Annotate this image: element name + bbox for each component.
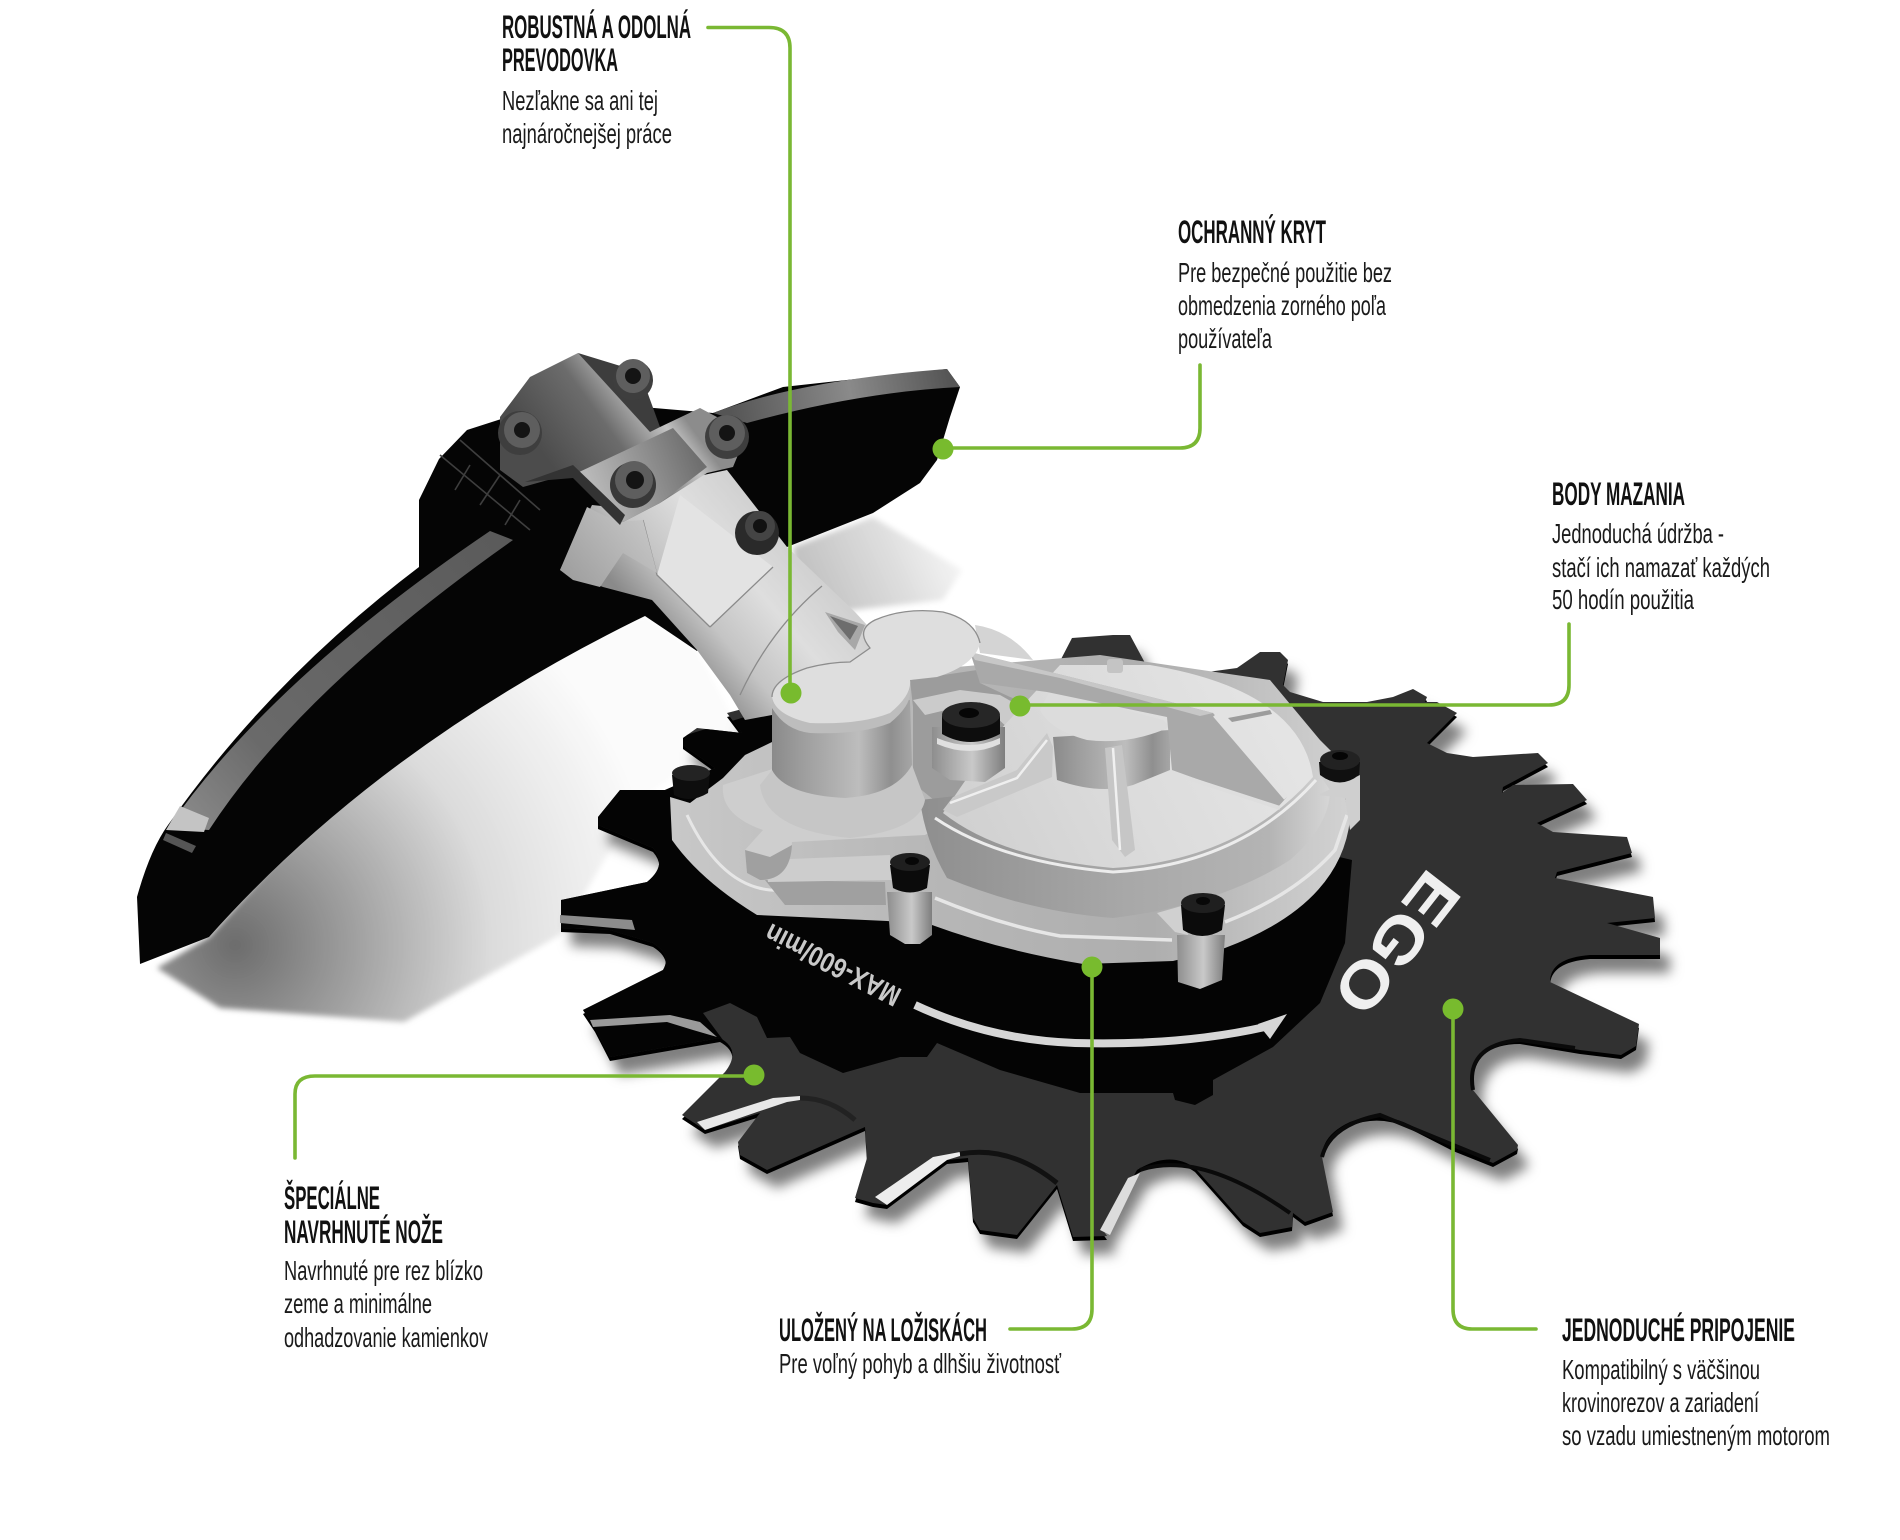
- leader: special blades: [295, 1064, 764, 1158]
- callout: robust gearbox: ROBUSTNÁ A ODOLNÁ: [502, 9, 691, 45]
- cutting blade: [540, 635, 1660, 1241]
- callout: robust gearbox: najnáročnejšej práce: [502, 118, 672, 149]
- EGO logo: EGO: [1319, 857, 1475, 1029]
- leader: easy attachment: [1442, 998, 1536, 1329]
- shield rib: [970, 652, 1287, 808]
- protective guard: [137, 369, 960, 964]
- callout: protective cover: Pre bezpečné použitie bez: [1178, 257, 1392, 288]
- callout: robust gearbox: [502, 9, 691, 149]
- ground shadows under guard: [157, 517, 962, 1022]
- upper small pin: [1107, 659, 1123, 673]
- leader: protective cover: [932, 365, 1200, 460]
- callout: easy attachment: [1562, 1312, 1830, 1451]
- rotation arrow: [915, 1005, 1287, 1043]
- sharpened tooth edges: [560, 915, 1575, 1235]
- leader: robust gearbox: [708, 28, 802, 704]
- callout: bearings: Pre voľný pohyb a dlhšiu životnosť: [779, 1348, 1061, 1379]
- gearbox: [670, 652, 1360, 964]
- callout: special blades: NAVRHNUTÉ NOŽE: [284, 1214, 443, 1250]
- clamp: [500, 353, 747, 522]
- callout: protective cover: obmedzenia zorného poľa: [1178, 290, 1386, 321]
- callout: lubrication points: BODY MAZANIA: [1552, 476, 1685, 512]
- callout: robust gearbox: PREVODOVKA: [502, 42, 618, 78]
- callout: special blades: odhadzovanie kamienkov: [284, 1322, 488, 1353]
- callout: protective cover: OCHRANNÝ KRYT: [1178, 214, 1326, 250]
- flange: [670, 655, 1360, 964]
- disc wall: [920, 765, 1330, 918]
- shaft tube and clamp: [498, 353, 890, 720]
- callout: bearings: ULOŽENÝ NA LOŽISKÁCH: [779, 1312, 987, 1348]
- bolts: [672, 702, 1360, 989]
- radial spokes: [1105, 745, 1135, 857]
- front right bolt and boss: [1157, 893, 1225, 989]
- callout: easy attachment: Kompatibilný s väčšinou: [1562, 1354, 1760, 1385]
- callout: lubrication points: stačí ich namazať každých: [1552, 552, 1770, 583]
- cast lobe: [723, 760, 933, 880]
- callout: lubrication points: Jednoduchá údržba -: [1552, 518, 1724, 549]
- callout: easy attachment: krovinorezov a zariadení: [1562, 1387, 1759, 1418]
- callout: special blades: Navrhnuté pre rez blízko: [284, 1255, 483, 1286]
- callout: protective cover: [1178, 214, 1392, 354]
- right bolt: [1318, 750, 1360, 830]
- clamp bolts: [498, 359, 779, 555]
- post and lobed cover: [760, 611, 1033, 838]
- hub: [1053, 730, 1170, 789]
- leader: bearings: [1010, 956, 1102, 1329]
- callout: special blades: ŠPECIÁLNE: [284, 1180, 380, 1216]
- callout: special blades: zeme a minimálne: [284, 1288, 432, 1319]
- callout: special blades: [284, 1180, 488, 1353]
- front left bolt and boss: [887, 853, 932, 944]
- callout: robust gearbox: Nezľakne sa ani tej: [502, 85, 658, 116]
- callout: protective cover: používateľa: [1178, 323, 1272, 354]
- callout: bearings: [779, 1312, 1061, 1379]
- leader: lubrication points: [1010, 624, 1569, 716]
- left bolt: [672, 765, 710, 799]
- recess: [910, 670, 1053, 813]
- blade text: max speed: MAX-600/min: [760, 917, 906, 1012]
- disc face: [943, 665, 1313, 868]
- centre bolt on boss: [932, 702, 1005, 782]
- callout: lubrication points: 50 hodín použitia: [1552, 584, 1694, 615]
- black reflection of gearbox on blade: [540, 700, 1352, 1105]
- callout: lubrication points: [1552, 476, 1770, 615]
